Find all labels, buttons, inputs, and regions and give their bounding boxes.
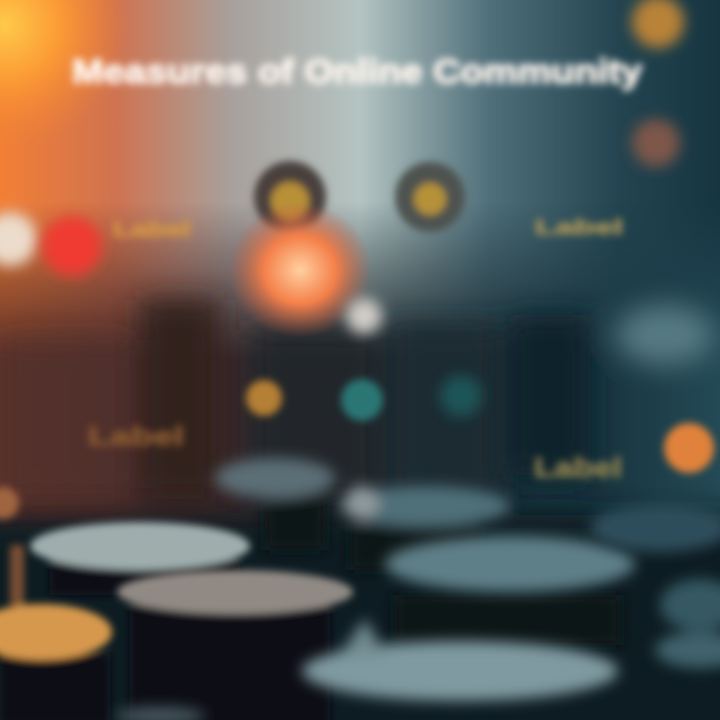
icon: left edge orange dot (0, 487, 19, 519)
platforms (0, 458, 720, 720)
dark city silhouettes (0, 300, 720, 720)
icon: right badge (632, 119, 680, 167)
icon: left red circle (42, 216, 102, 276)
platform: bottom small (115, 707, 205, 720)
platform: large front (302, 618, 618, 701)
platform: right (385, 536, 635, 592)
background (0, 0, 720, 531)
small white dot (346, 298, 382, 334)
icon: top right badge (632, 0, 684, 48)
icon: orange dot right (664, 423, 714, 473)
platform: far right (590, 504, 720, 668)
platform: left (30, 522, 250, 595)
icon: dark ring left with gold centre (254, 161, 326, 233)
icon: dark ring right with gold centre (395, 162, 465, 232)
platform: centre back (215, 458, 335, 550)
platform: right dark base (395, 595, 620, 645)
label: lower left: Label (88, 421, 184, 451)
platform: centre right (340, 486, 510, 570)
icon: dark teal dot (440, 375, 482, 417)
icon: amber dot (246, 380, 282, 416)
title: Measures of Online Community (72, 53, 642, 91)
icon: left white circle (0, 212, 37, 266)
icon: teal dot (341, 379, 383, 421)
platform: middle peach (117, 570, 353, 720)
label: right: Label (535, 217, 623, 239)
label: left: Label (113, 219, 191, 241)
central glow (228, 202, 372, 338)
platform: orange left (0, 545, 112, 720)
label: lower right: Label (534, 452, 622, 483)
